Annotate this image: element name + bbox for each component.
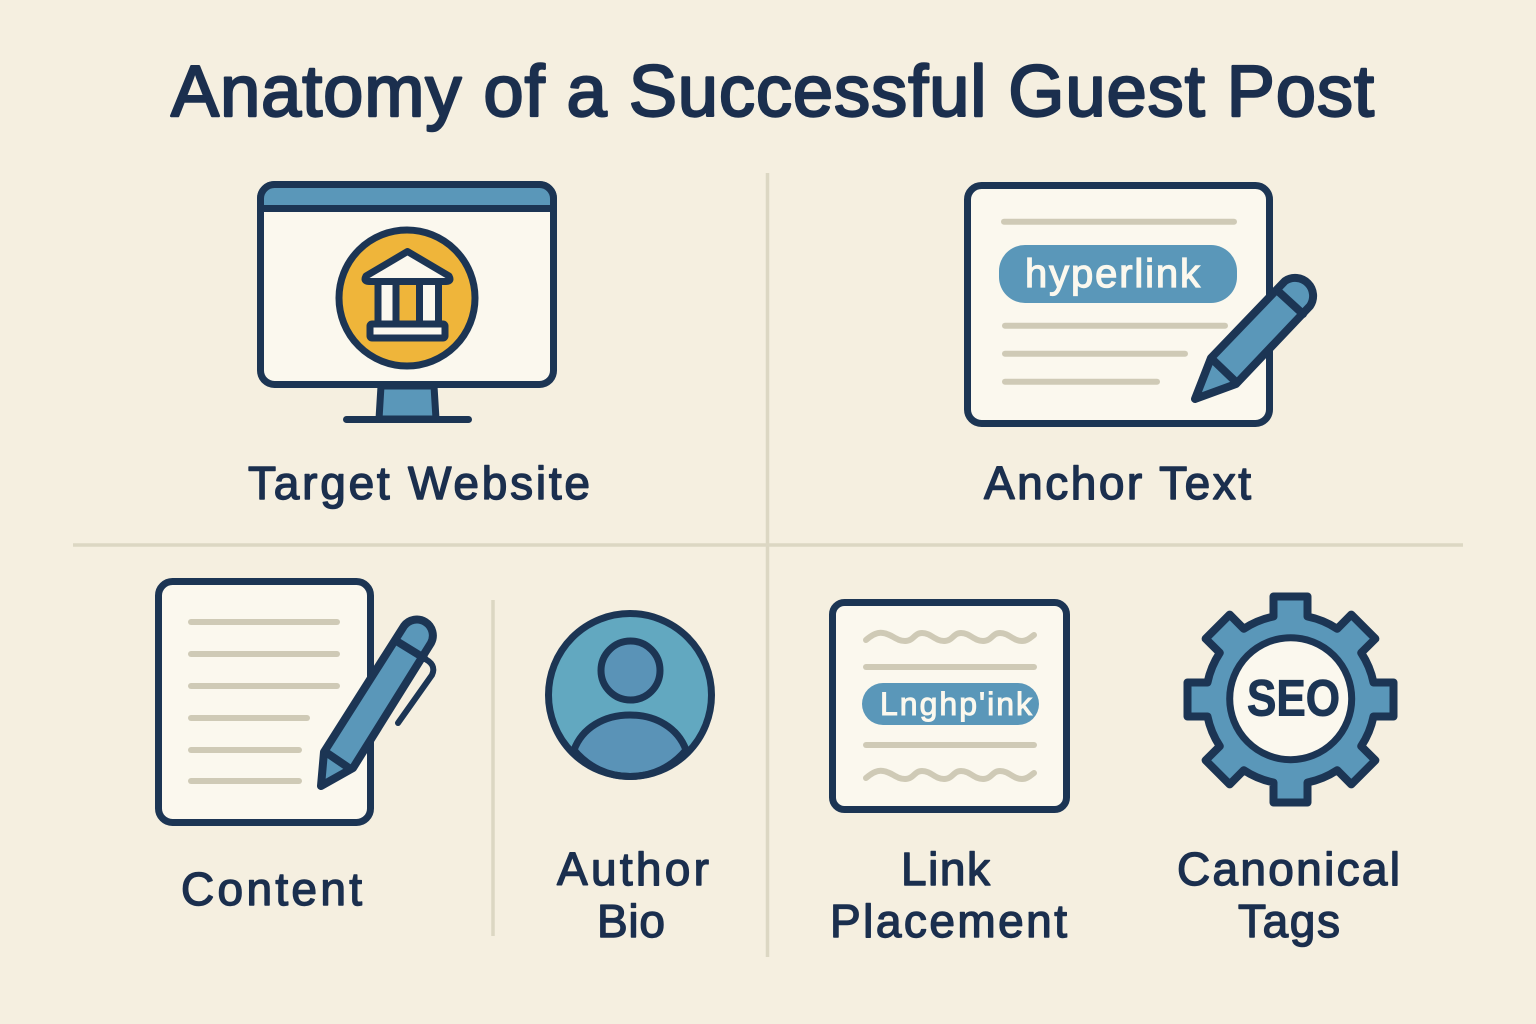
- panel: link placement: [830, 602, 1067, 947]
- label: anchor text: Anchor Text: [984, 457, 1251, 509]
- panel: canonical tags: [1177, 596, 1400, 947]
- label: link placement: [830, 843, 1067, 947]
- label: canonical tags: [1177, 843, 1400, 947]
- icon: monitor with institution: [260, 184, 554, 420]
- icon: document with link: Lnghp'ink: [880, 686, 1033, 722]
- label: link placement: Link: [901, 843, 991, 895]
- label: author bio: [557, 843, 709, 947]
- icon: document with hyperlink and pencil: hyperlink: [1025, 252, 1201, 296]
- label: link placement: Placement: [830, 895, 1067, 947]
- label: canonical tags: Canonical: [1177, 843, 1400, 895]
- icon: SEO gear: SEO: [1247, 670, 1340, 726]
- icon: document with hyperlink and pencil: [968, 186, 1313, 424]
- icon: document with pen: [158, 582, 433, 822]
- label: canonical tags: Tags: [1238, 895, 1340, 947]
- panel: content: [158, 582, 433, 915]
- icon: document with link: [832, 602, 1066, 810]
- label: content: Content: [181, 863, 362, 915]
- panel: author bio: [548, 614, 712, 947]
- label: author bio: Bio: [597, 895, 665, 947]
- panel: anchor text: [968, 186, 1313, 509]
- icon: author avatar: [548, 614, 712, 776]
- title: Anatomy of a Successful Guest Post: [171, 52, 1374, 132]
- label: author bio: Author: [557, 843, 709, 895]
- label: target website: Target Website: [248, 457, 590, 509]
- panel: target website: [248, 184, 590, 509]
- icon: SEO gear: [1188, 596, 1394, 802]
